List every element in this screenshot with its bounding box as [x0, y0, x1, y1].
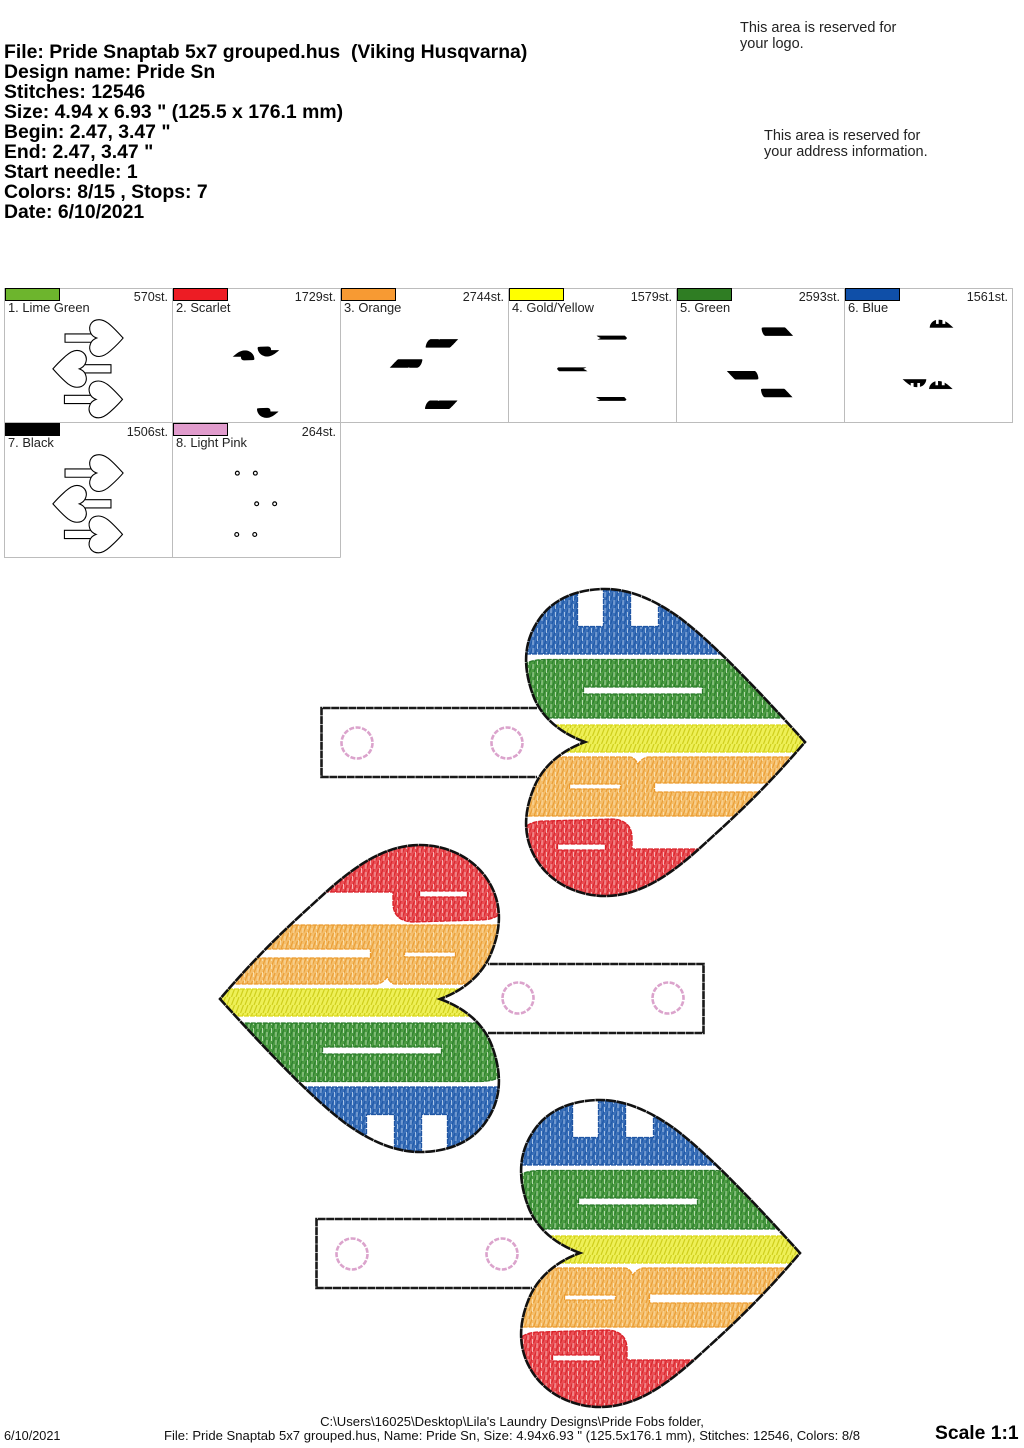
red band — [515, 1330, 715, 1411]
thumbnail 4: Gold/Yellow: 1579st. — [631, 290, 672, 304]
design information header: End: 2.47, 3.47 " — [4, 141, 153, 163]
thumbnail 7: Black: 1506st. — [127, 425, 168, 439]
address placeholder note: your address information. — [764, 144, 928, 160]
thumbnail 1: Lime Green — [6, 288, 168, 418]
yellow band — [213, 989, 495, 1016]
yellow band — [530, 725, 812, 752]
heart outline — [521, 1100, 800, 1407]
design information header: Stitches: 12546 — [4, 81, 145, 103]
blue band — [515, 1096, 825, 1165]
thumbnail 3: Orange: 3. Orange — [344, 300, 401, 315]
thumbnail 6: Blue: 6. Blue — [848, 300, 888, 315]
tab outline — [322, 708, 537, 777]
thumbnail 3: Orange: 2744st. — [463, 290, 504, 304]
heart outline — [220, 845, 499, 1152]
design information header: Design name: Pride Sn — [4, 61, 215, 83]
logo placeholder note — [740, 20, 897, 52]
logo placeholder note: your logo. — [740, 36, 804, 52]
logo placeholder note: This area is reserved for — [740, 20, 897, 36]
thumbnail 4: Gold/Yellow — [510, 288, 672, 401]
design information header: Begin: 2.47, 3.47 " — [4, 121, 171, 143]
red band — [520, 819, 720, 900]
footer file details — [164, 1414, 860, 1443]
orange band — [520, 757, 800, 816]
orange band — [515, 1268, 795, 1327]
thumbnail 6: Blue: 1561st. — [967, 290, 1008, 304]
thumbnail 6: Blue — [846, 288, 1008, 389]
heart outline — [526, 589, 805, 896]
thumbnail 5: Green: 5. Green — [680, 300, 730, 315]
thumbnail 2: Scarlet — [174, 288, 336, 418]
blue band — [520, 585, 830, 654]
thumbnail 8: Light Pink — [174, 424, 336, 536]
thumbnail 7: Black — [6, 424, 168, 553]
footer file details: File: Pride Snaptab 5x7 grouped.hus, Name: Pride Sn, Size: 4.94x6.93 " (125.5x176.1 mm), Stitches: 12546, Colors: 8/8 — [164, 1428, 860, 1443]
thumbnail 7: Black: 7. Black — [8, 435, 54, 450]
thumbnail 8: Light Pink: 8. Light Pink — [176, 435, 247, 450]
snap circles — [342, 728, 522, 758]
thumbnail 1: Lime Green: 1. Lime Green — [8, 300, 90, 315]
blue band — [195, 1087, 505, 1156]
red band — [305, 841, 505, 922]
thumbnail 5: Green — [678, 288, 840, 396]
thumbnail color-stop grid — [4, 288, 1012, 558]
footer file details: C:\Users\16025\Desktop\Lila's Laundry Designs\Pride Fobs folder, — [320, 1414, 704, 1429]
tab outline — [316, 1219, 532, 1288]
address placeholder note — [764, 128, 928, 160]
thumbnail 2: Scarlet: 2. Scarlet — [176, 300, 231, 315]
green band — [225, 1023, 505, 1082]
design information header: Colors: 8/15 , Stops: 7 — [4, 181, 208, 203]
thumbnail 1: Lime Green: 570st. — [134, 290, 168, 304]
green band — [520, 660, 800, 718]
snap circles — [336, 1238, 518, 1270]
snap circles — [502, 982, 684, 1014]
tab outline — [488, 964, 704, 1033]
orange band — [225, 925, 505, 984]
design information header — [4, 41, 527, 223]
address placeholder note: This area is reserved for — [764, 128, 921, 144]
thumbnail 3: Orange — [342, 288, 504, 408]
footer date: 6/10/2021 — [4, 1429, 60, 1443]
thumbnail 2: Scarlet: 1729st. — [295, 290, 336, 304]
middle heart snap tab (rotated) — [195, 841, 704, 1156]
design information header: Start needle: 1 — [4, 161, 138, 183]
bottom heart snap tab — [316, 1096, 825, 1411]
scale label: Scale 1:1 — [935, 1423, 1019, 1444]
design information header: Size: 4.94 x 6.93 " (125.5 x 176.1 mm) — [4, 101, 343, 123]
thumbnail 8: Light Pink: 264st. — [302, 425, 336, 439]
green band — [515, 1170, 795, 1229]
top heart snap tab — [322, 585, 830, 900]
yellow band — [525, 1236, 807, 1263]
design information header: File: Pride Snaptab 5x7 grouped.hus (Viking Husqvarna) — [4, 41, 527, 63]
design information header: Date: 6/10/2021 — [4, 201, 144, 223]
thumbnail 5: Green: 2593st. — [799, 290, 840, 304]
thumbnail 4: Gold/Yellow: 4. Gold/Yellow — [512, 300, 595, 315]
